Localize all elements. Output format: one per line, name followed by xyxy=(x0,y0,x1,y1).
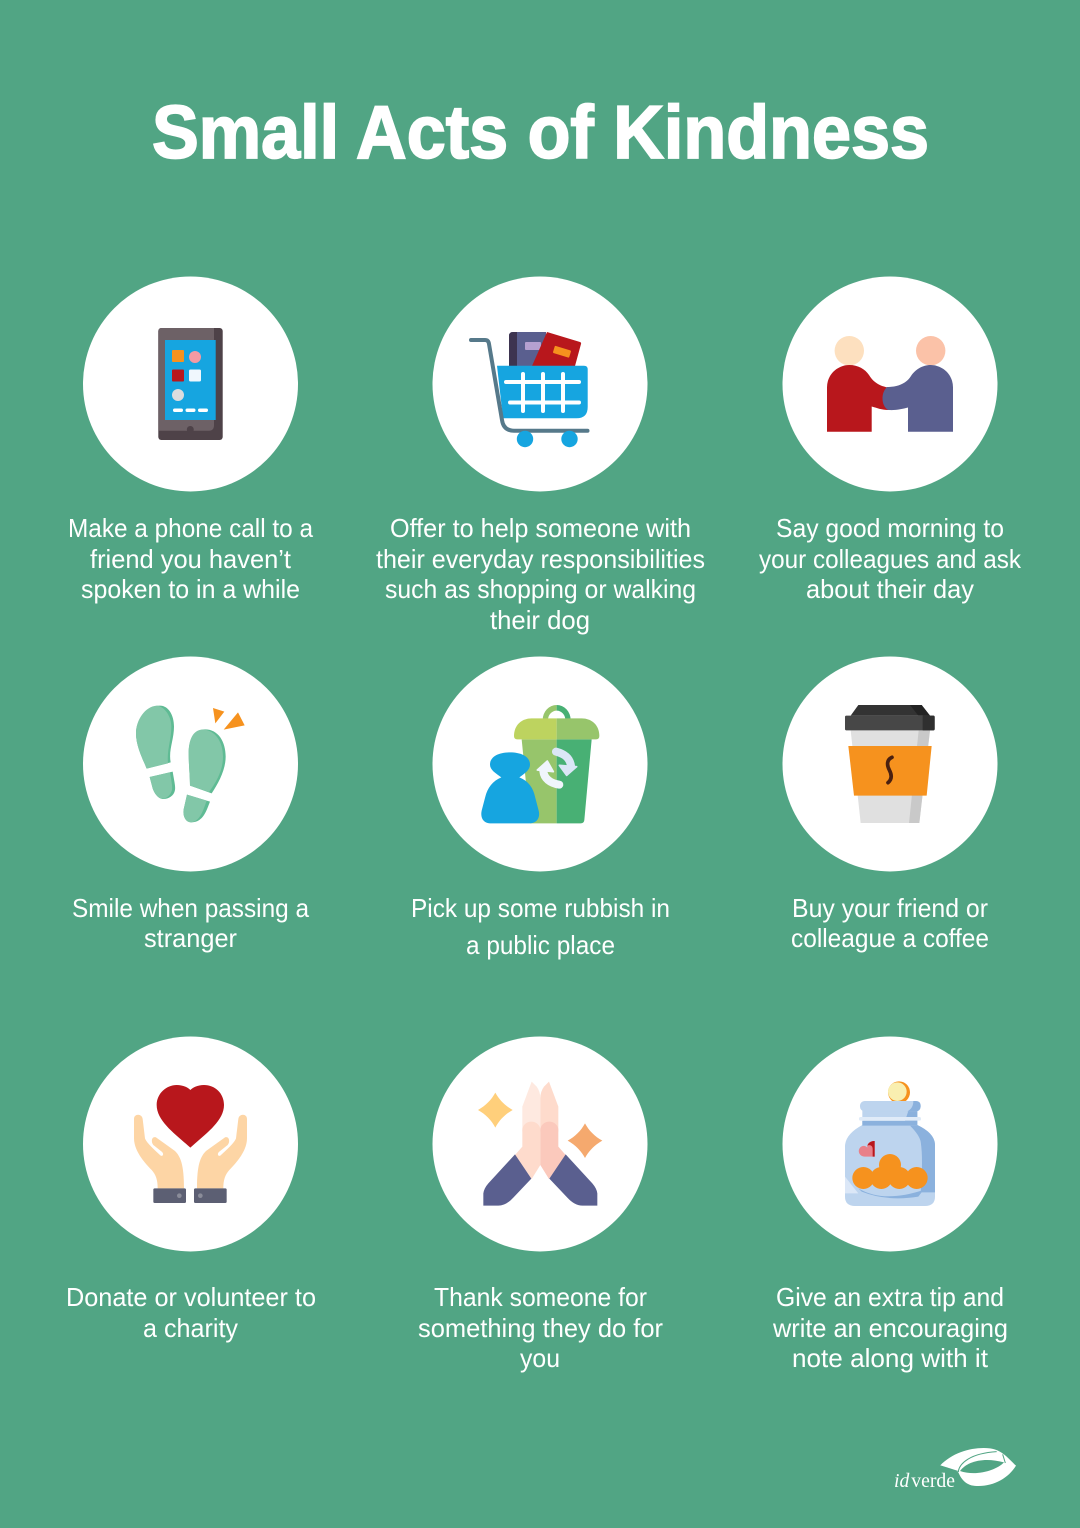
caption: stranger xyxy=(144,923,237,953)
panel: extra tip xyxy=(772,1036,1008,1373)
caption: write an encouraging xyxy=(772,1313,1008,1343)
title: Small Acts of Kindness xyxy=(152,90,929,174)
caption xyxy=(72,893,310,953)
caption xyxy=(418,1282,663,1373)
caption: Pick up some rubbish in xyxy=(411,893,670,923)
icon: heart in hands xyxy=(83,1036,298,1252)
icon: handshake xyxy=(782,276,998,492)
caption xyxy=(376,513,705,635)
caption: your colleagues and ask xyxy=(759,544,1022,574)
panel: phone call xyxy=(68,276,313,604)
caption: Offer to help someone with xyxy=(390,513,691,543)
caption: Buy your friend or xyxy=(792,893,988,923)
panel: good morning xyxy=(759,276,1022,604)
icon: tip jar xyxy=(782,1036,998,1252)
caption xyxy=(411,893,670,960)
panel: thank someone xyxy=(418,1036,663,1373)
caption: note along with it xyxy=(792,1343,989,1373)
caption: Say good morning to xyxy=(776,513,1004,543)
caption: friend you haven’t xyxy=(90,544,292,574)
caption: something they do for xyxy=(418,1313,663,1343)
caption xyxy=(791,893,989,953)
caption: their everyday responsibilities xyxy=(376,544,705,574)
caption: a charity xyxy=(143,1313,238,1343)
panel: coffee xyxy=(782,656,998,953)
icon: footprints xyxy=(83,656,298,872)
panel: donate xyxy=(66,1036,316,1343)
caption: Give an extra tip and xyxy=(776,1282,1004,1312)
caption: spoken to in a while xyxy=(81,574,300,604)
icon: shopping cart xyxy=(432,276,648,492)
caption: a public place xyxy=(466,930,615,960)
caption: their dog xyxy=(490,605,590,635)
logo: idverde xyxy=(894,1448,1016,1492)
panel: smile xyxy=(72,656,310,953)
caption xyxy=(759,513,1022,604)
caption: colleague a coffee xyxy=(791,923,989,953)
panel: rubbish xyxy=(411,656,670,960)
caption xyxy=(772,1282,1008,1373)
panel: shopping help xyxy=(376,276,705,635)
caption: Thank someone for xyxy=(434,1282,647,1312)
caption: you xyxy=(520,1343,560,1373)
caption xyxy=(66,1282,316,1343)
caption: Donate or volunteer to xyxy=(66,1282,316,1312)
caption xyxy=(68,513,313,604)
logo: idverde: idverde xyxy=(894,1470,955,1492)
icon: phone xyxy=(83,276,298,492)
icon: praying hands xyxy=(432,1036,648,1252)
caption: about their day xyxy=(806,574,974,604)
caption: such as shopping or walking xyxy=(385,574,696,604)
icon: coffee cup xyxy=(782,656,998,872)
caption: Make a phone call to a xyxy=(68,513,313,543)
caption: Smile when passing a xyxy=(72,893,310,923)
icon: recycling bin and bag xyxy=(432,656,648,872)
